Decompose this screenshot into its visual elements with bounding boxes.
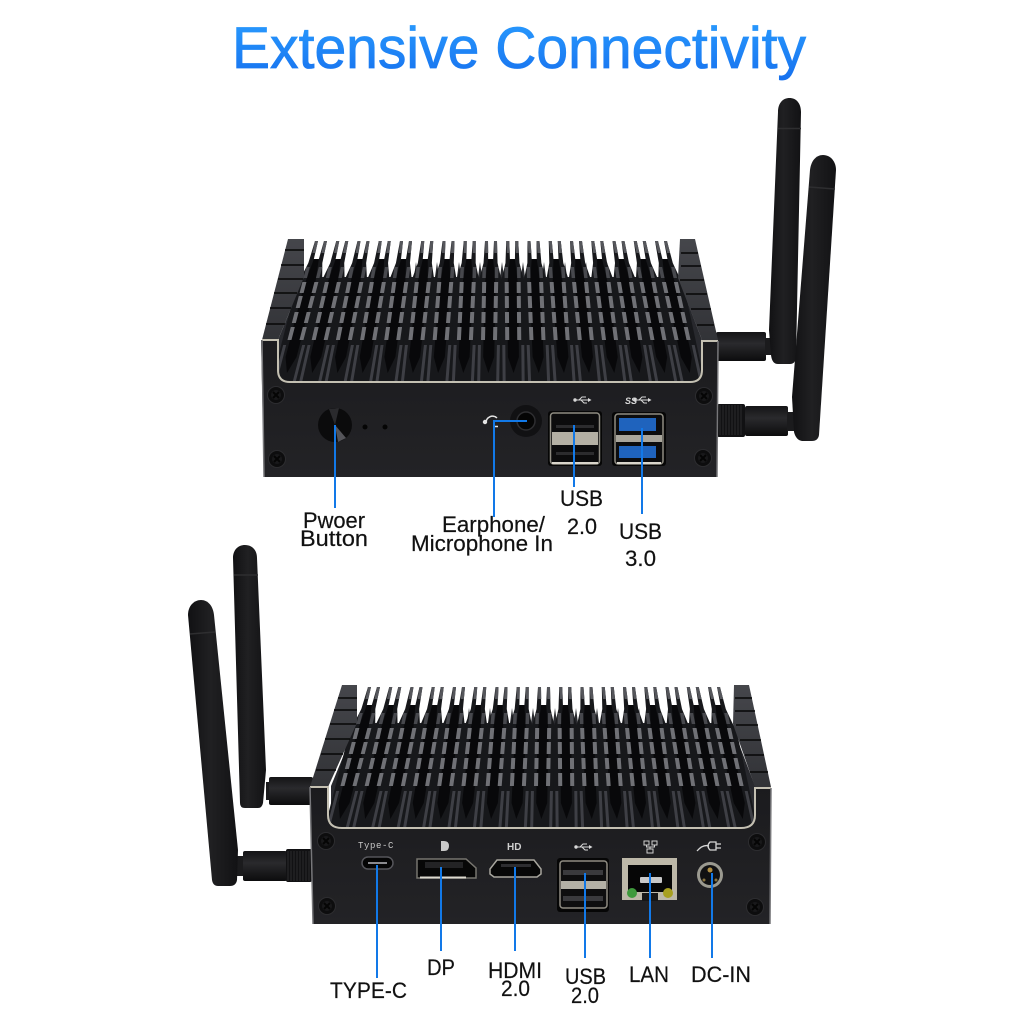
label: Power Button <box>300 425 368 551</box>
icon: LAN <box>644 841 657 853</box>
antenna connectors: rear view <box>237 777 313 882</box>
label: USB 2.0 front: 2.0 <box>567 514 597 539</box>
icon: USB 2.0 <box>573 397 592 403</box>
screws: rear panel <box>318 832 766 916</box>
label: HDMI 2.0 <box>488 867 542 1001</box>
antenna: rear upright left <box>233 545 266 808</box>
HDMI port and marking <box>490 842 541 877</box>
title: Extensive Connectivity <box>232 16 806 81</box>
audio jack <box>510 405 542 437</box>
label: DP <box>427 867 455 980</box>
label: HDMI 2.0: HDMI <box>488 958 542 983</box>
icon: USB <box>574 844 592 850</box>
power button with LEDs <box>318 408 388 442</box>
label: TYPE-C: TYPE-C <box>330 978 407 1003</box>
icon: DC power plug <box>697 842 721 851</box>
left side wall: rear view <box>310 685 357 787</box>
label: USB 3.0: 3.0 <box>625 546 656 571</box>
icon: USB 3.0: SS <box>625 396 637 406</box>
USB 3.0 dual port <box>612 412 666 466</box>
USB 2.0 dual port <box>548 411 602 466</box>
label: DP: DP <box>427 955 455 980</box>
icon: USB 3.0 <box>625 396 652 406</box>
LAN port <box>622 858 677 901</box>
label: Power Button: Pwoer <box>303 508 365 533</box>
label: Earphone / Microphone In: Microphone In <box>411 531 553 556</box>
label: HDMI 2.0: 2.0 <box>501 976 530 1001</box>
label: Earphone / Microphone In: Earphone/ <box>442 512 546 537</box>
front panel <box>261 340 718 477</box>
heatsink fins: rear view <box>325 687 758 829</box>
antenna connectors: front view <box>716 332 795 437</box>
label: USB 3.0: USB <box>619 519 662 544</box>
icon: headphone <box>483 416 498 426</box>
HDMI port and marking: HD <box>507 842 521 853</box>
antenna: front tilted <box>792 155 836 441</box>
label: Power Button: Button <box>300 526 368 551</box>
DP port and marking <box>417 841 476 878</box>
label: USB 2.0 rear: 2.0 <box>571 983 599 1008</box>
label: USB 3.0 <box>619 428 662 571</box>
heatsink fins: front view <box>272 241 705 383</box>
DC-IN jack <box>697 862 723 888</box>
label: DC-IN <box>691 873 751 987</box>
Type-C port and marking: Type-C <box>358 841 394 851</box>
label: USB 2.0 rear: USB <box>565 964 606 989</box>
right side wall: rear view <box>733 685 771 787</box>
label: TYPE-C <box>330 865 407 1003</box>
label: USB 2.0 front <box>560 425 603 539</box>
mini PC: front view <box>261 98 836 477</box>
USB 2.0 rear port <box>557 858 609 912</box>
antenna: front tilted left <box>188 600 238 886</box>
right side wall <box>678 239 718 340</box>
label: LAN: LAN <box>629 962 669 987</box>
label: DC-IN: DC-IN <box>691 962 751 987</box>
label: USB 2.0 front: USB <box>560 486 603 511</box>
label: LAN <box>629 873 669 987</box>
left side wall <box>262 239 304 340</box>
screws: front panel <box>268 386 712 468</box>
Type-C port and marking <box>358 841 394 869</box>
rear panel <box>310 787 771 924</box>
label: Earphone / Microphone In <box>411 421 553 556</box>
antenna: rear upright <box>769 98 801 364</box>
label: USB 2.0 rear <box>565 873 606 1008</box>
mini PC: rear view <box>188 545 771 924</box>
